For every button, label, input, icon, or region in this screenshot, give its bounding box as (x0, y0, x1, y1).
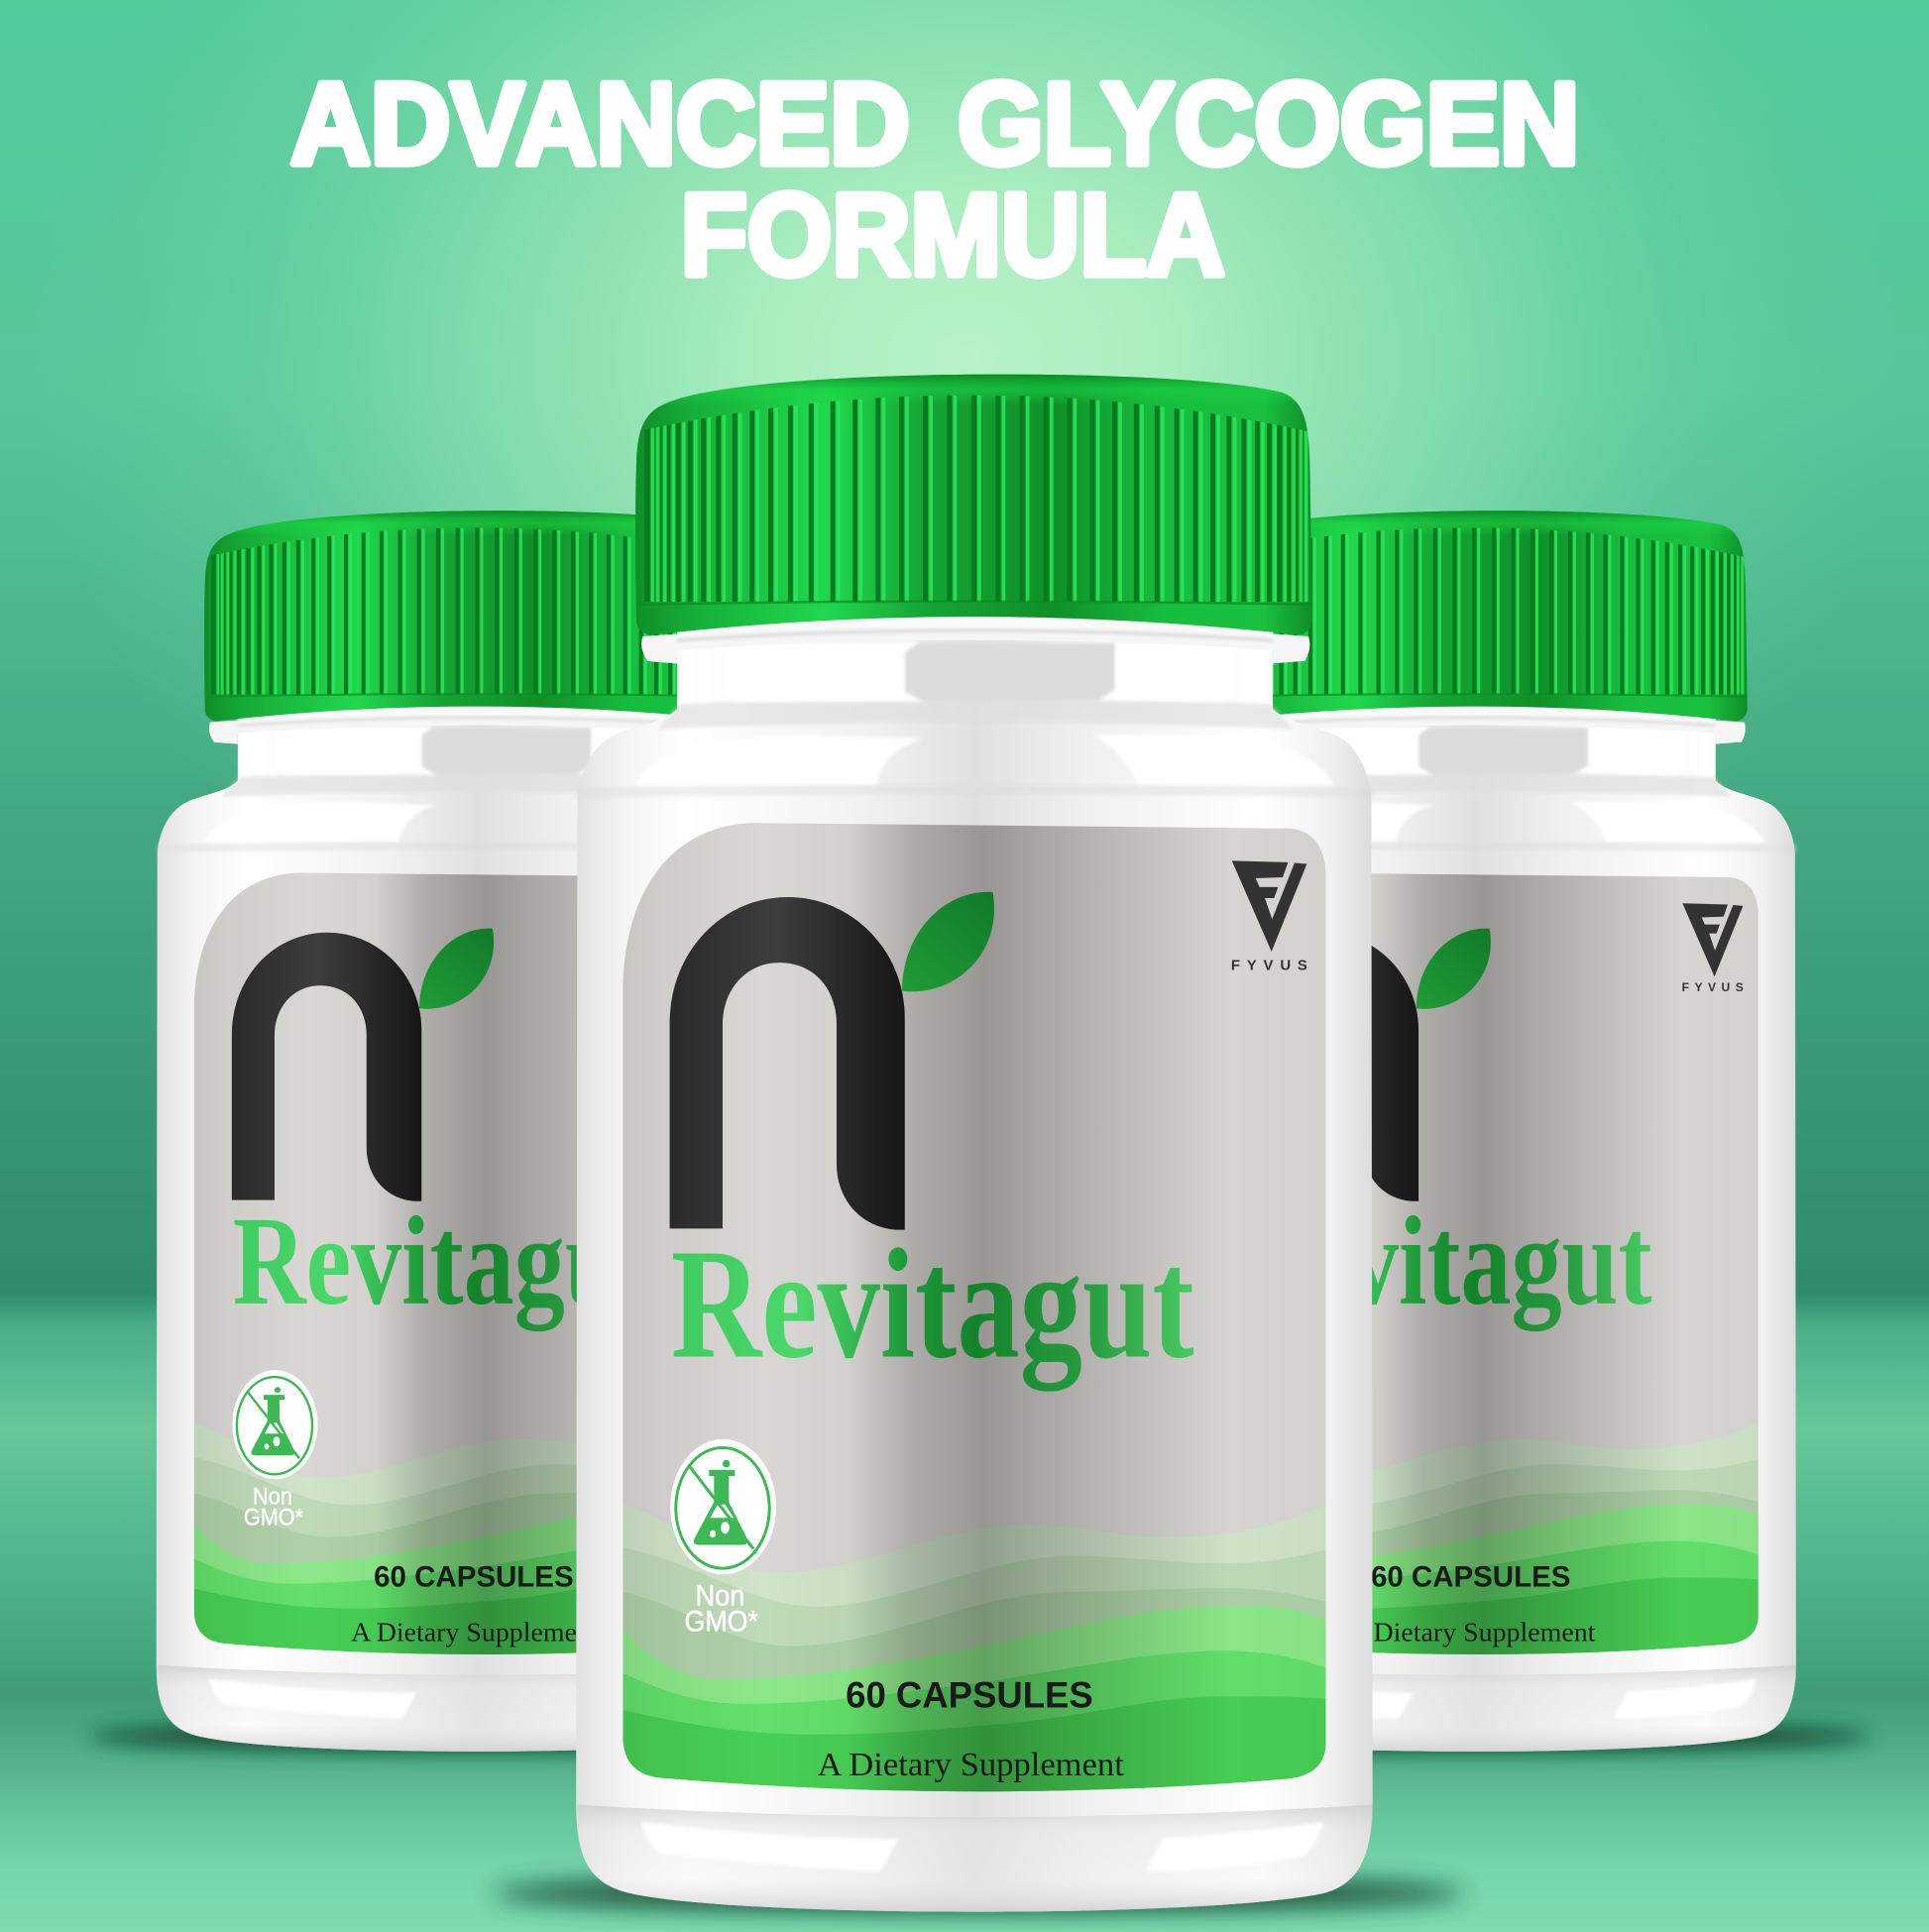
bottle right: product name: Revitagut (1230, 1191, 1652, 1332)
bottle left: product name: Revitagut (233, 1191, 655, 1332)
product bottle: left (89, 507, 873, 1752)
bottle right: non gmo: Non (1250, 1483, 1290, 1510)
bottle left: brand: FYVUS (685, 980, 746, 994)
product bottle: front (493, 370, 1465, 1912)
bottle front: product name: Revitagut (671, 1217, 1194, 1392)
title: FORMULA (681, 170, 1225, 299)
background glow (0, 0, 1929, 1295)
title: GLYCOGEN (958, 58, 1579, 188)
bottle right: capsule count: 60 CAPSULES (1371, 1561, 1570, 1594)
bottle left: non gmo line 2: GMO* (244, 1504, 303, 1531)
background wall (0, 0, 1929, 1295)
bottle left: capsule count: 60 CAPSULES (374, 1561, 574, 1594)
bottle right: non gmo line 2: GMO* (1241, 1504, 1301, 1531)
title: ADVANCED (290, 58, 910, 188)
bottle front: non gmo: Non (696, 1579, 744, 1612)
bottle front: non gmo line 2: GMO* (684, 1605, 758, 1638)
bottle right: brand: FYVUS (1682, 980, 1744, 994)
bottle right: descriptor: A Dietary Supplement (1348, 1618, 1596, 1648)
bottle front: descriptor: A Dietary Supplement (818, 1747, 1125, 1783)
bottle left: non gmo: Non (253, 1483, 292, 1510)
product bottle: right (1085, 507, 1871, 1752)
title (290, 58, 1579, 299)
bottle front: capsule count: 60 CAPSULES (846, 1673, 1093, 1715)
bottle left: descriptor: A Dietary Supplement (351, 1618, 599, 1648)
bottle front: brand: FYVUS (1231, 959, 1307, 974)
background floor (0, 1294, 1929, 1932)
